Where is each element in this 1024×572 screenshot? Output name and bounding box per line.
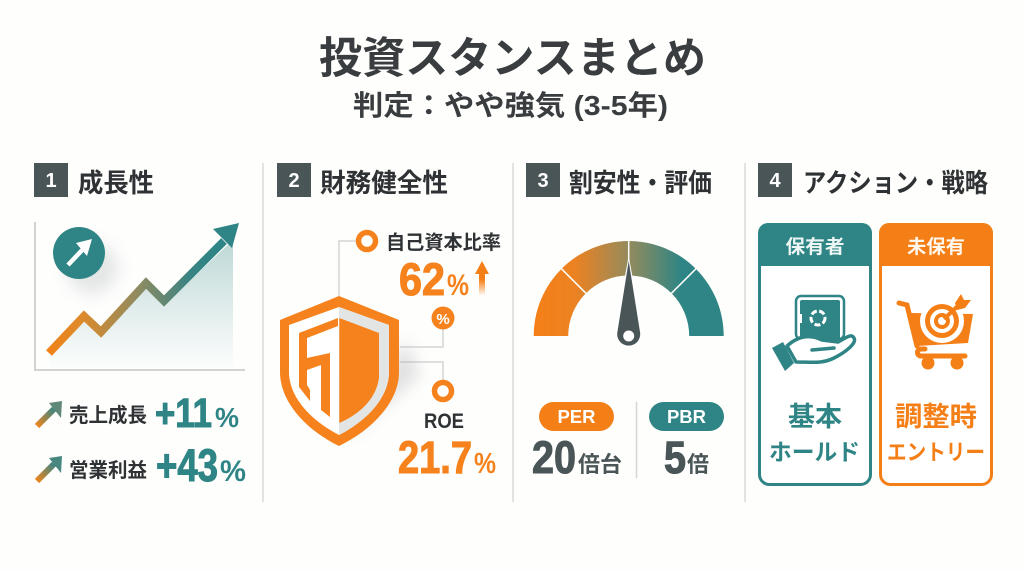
PER block: 20 (532, 432, 576, 483)
section heading 2 (277, 163, 448, 198)
divider lines (263, 163, 745, 502)
card: non-holders (879, 223, 993, 484)
card: holders: ホールド (769, 439, 860, 465)
metric: sales growth: 売上成長 (69, 403, 147, 427)
icon: percent badge: % (436, 311, 450, 328)
title: 投資スタンスまとめ (319, 35, 706, 83)
card: non-holders: 未保有 (907, 236, 965, 258)
connector lines (339, 241, 443, 381)
PER block: 倍台 (578, 452, 622, 477)
label: ROE: ROE (424, 410, 464, 433)
icon: cart with target (899, 294, 973, 370)
metric: operating profit growth: % (220, 455, 246, 488)
value: 62%: 62 (399, 254, 445, 305)
section heading 3 (526, 163, 712, 198)
panel: growth (34, 163, 246, 491)
line chart (35, 222, 245, 370)
metric: sales growth: % (215, 402, 239, 433)
PER block: PER (557, 406, 596, 427)
value: 62%: % (447, 269, 469, 302)
card: holders (758, 223, 872, 484)
card: holders: 保有者 (786, 236, 844, 258)
metric: sales growth: +11 (155, 390, 212, 436)
section heading 4: アクション・戦略 (803, 168, 988, 198)
metric: operating profit growth: +43 (156, 440, 218, 491)
section heading 2: 財務健全性 (320, 168, 448, 198)
value: 21.7%: 21.7 (398, 432, 472, 483)
metric: operating profit growth: 営業利益 (69, 459, 147, 482)
PBR block: 5 (664, 432, 686, 483)
section heading 3: 割安性・評価 (569, 168, 712, 198)
section heading 1 (34, 163, 154, 198)
section heading 1: 1 (45, 170, 57, 192)
icon: shield (280, 296, 420, 446)
icon: percent badge (432, 306, 454, 330)
gauge needle (614, 256, 643, 346)
section heading 4 (758, 163, 988, 198)
icon: safe in hand (772, 296, 854, 371)
value: 21.7%: % (474, 448, 496, 480)
card: non-holders: 調整時 (895, 402, 977, 432)
icon: growth arrow badge (53, 227, 118, 294)
gauge (534, 241, 724, 346)
icon: up arrow (475, 261, 489, 295)
icon: ring marker equity (358, 232, 376, 250)
PBR block: 倍 (687, 452, 709, 477)
card: holders: 基本 (788, 402, 842, 432)
panel: valuation (526, 163, 724, 483)
divider PER PBR (636, 402, 638, 478)
panel: action and strategy (758, 163, 993, 484)
section heading 1: 成長性 (78, 168, 154, 198)
icon: ring marker ROE (434, 382, 452, 400)
label: equity ratio: 自己資本比率 (386, 232, 501, 254)
metric: sales growth (37, 390, 239, 436)
PER block (532, 402, 622, 483)
metric: operating profit growth (37, 440, 246, 491)
PBR block: PBR (667, 406, 706, 427)
section heading 3: 3 (537, 170, 549, 192)
section heading 4: 4 (769, 170, 781, 192)
section heading 2: 2 (288, 170, 300, 192)
panel: financial health (277, 163, 501, 483)
subtitle: 判定：やや強気 (3-5年) (353, 90, 668, 121)
card: non-holders: エントリー (887, 440, 985, 465)
PBR block (649, 402, 724, 483)
